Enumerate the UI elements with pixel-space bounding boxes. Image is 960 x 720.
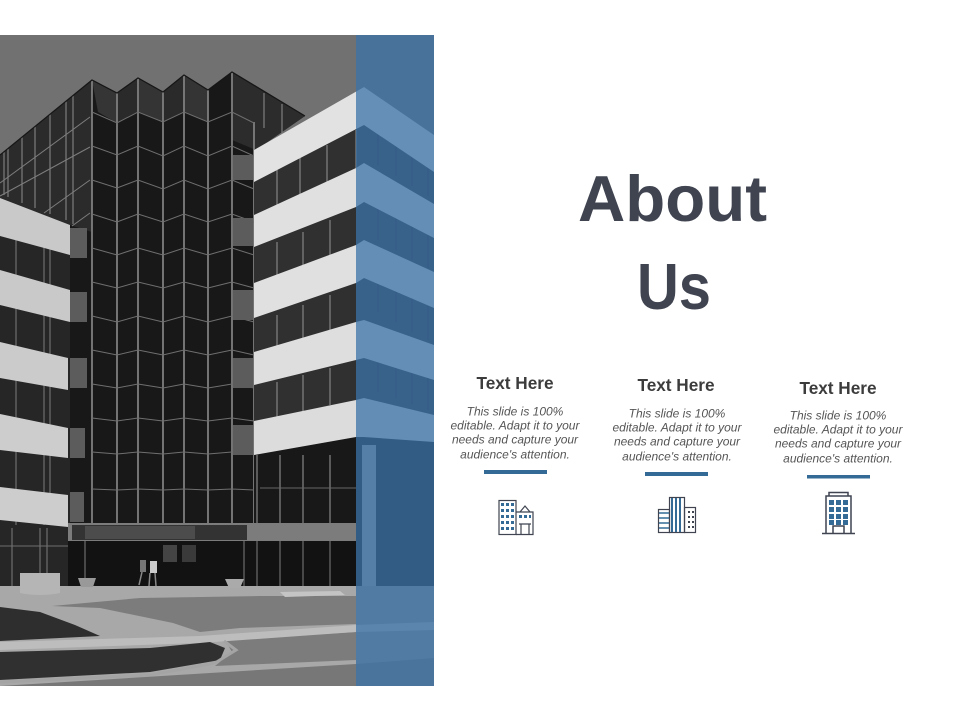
icon: hotel tower [822, 492, 855, 534]
text block 1: needs and capture your [452, 432, 579, 446]
column 1 [451, 373, 580, 534]
text block 2: audience's attention. [622, 450, 732, 464]
text block 3: editable. Adapt it to your [774, 422, 903, 436]
accent bar 3 [807, 475, 870, 478]
column 2 [613, 375, 742, 532]
blue overlay band [356, 35, 434, 686]
heading 1: Text Here [476, 373, 554, 393]
text block 1: editable. Adapt it to your [451, 418, 580, 432]
canopy and entrance [68, 523, 356, 587]
title: About [578, 162, 767, 235]
text block 1: This slide is 100% [467, 404, 564, 418]
heading 3: Text Here [799, 378, 877, 398]
text block 2: This slide is 100% [629, 406, 726, 420]
planters [20, 573, 244, 595]
tower [0, 72, 305, 530]
accent bar 2 [645, 472, 708, 476]
heading 2: Text Here [637, 375, 715, 395]
text block 3: needs and capture your [775, 436, 902, 450]
text block 2: needs and capture your [614, 434, 741, 448]
right wing [245, 87, 434, 600]
panel: building photo [0, 35, 434, 686]
text block 1: audience's attention. [460, 448, 570, 462]
icon: office buildings [499, 500, 533, 534]
icon: city towers [658, 498, 696, 532]
text block 3: audience's attention. [783, 452, 893, 466]
ground and lawns [0, 586, 434, 686]
accent bar 1 [484, 470, 547, 474]
left wing [0, 198, 70, 587]
text block 3: This slide is 100% [790, 408, 887, 422]
column 3 [774, 378, 903, 534]
title [578, 162, 767, 323]
title: Us [637, 250, 711, 323]
text block 2: editable. Adapt it to your [613, 420, 742, 434]
